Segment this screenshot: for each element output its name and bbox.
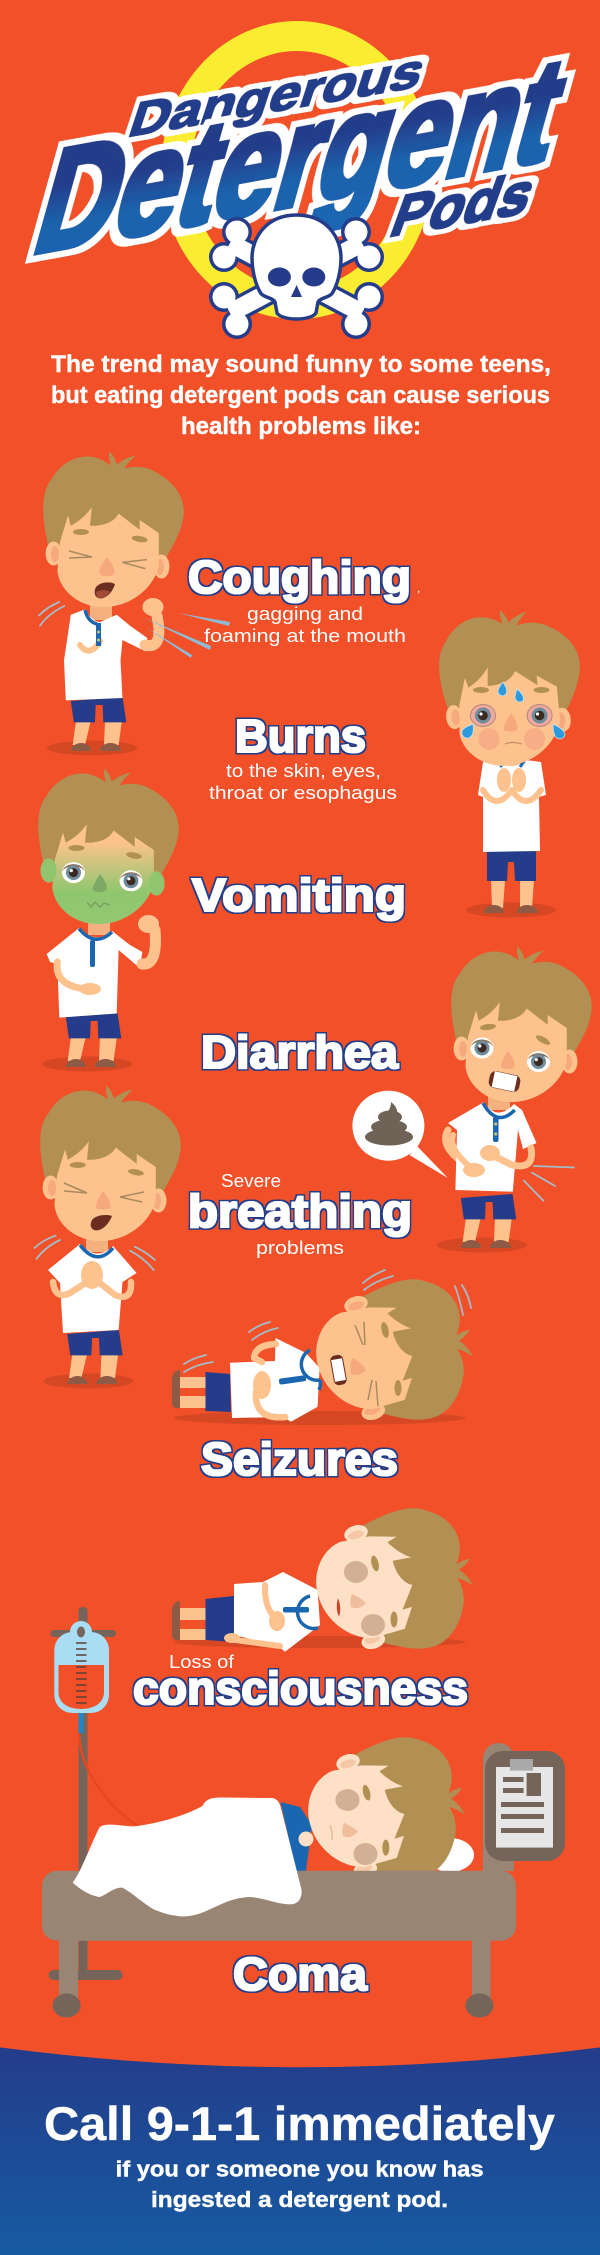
icon: IV stand and bag (49, 1607, 138, 1980)
boy: burns (434, 603, 589, 918)
text: Severe: Severe (221, 1171, 281, 1191)
boy in hospital bed (42, 1724, 565, 2018)
pillow (426, 1838, 474, 1872)
title word: Dangerous: Dangerous (122, 43, 432, 148)
blanket (73, 1798, 302, 1916)
clipboard (485, 1751, 565, 1861)
boy: seizures (172, 1266, 490, 1444)
text: gagging and foaming: gagging and (247, 604, 363, 624)
patient (280, 1724, 482, 1902)
heading: Coma: Coma (233, 1948, 367, 2000)
heading: consciousness: consciousness (133, 1662, 468, 1714)
footer panel (0, 2047, 600, 2255)
headboard (483, 1743, 514, 1871)
text: to the skin, eyes: to the skin, eyes, (226, 761, 381, 781)
intro text: but eating detergent pods can cause serious (51, 382, 550, 409)
text: gagging and foaming: foaming at the mouth (204, 626, 406, 646)
intro text: health problems like: (181, 413, 421, 440)
heading: breathing: breathing (188, 1185, 412, 1237)
text: gagging and foaming (204, 604, 406, 646)
title: Dangerous Detergent Pods (20, 25, 582, 339)
text: Loss of: Loss of (169, 1652, 235, 1672)
footer text: ingested a detergent pod. (151, 2187, 448, 2212)
title word: Pods: Pods (382, 158, 545, 250)
heading: Seizures: Seizures (201, 1433, 398, 1485)
pain lines (524, 1166, 574, 1201)
boy: vomiting (38, 768, 179, 1072)
intro text: The trend may sound funny to some teens, (51, 351, 551, 378)
heading: Burns: Burns (235, 710, 366, 762)
text: problems: problems (256, 1238, 344, 1258)
heading: Diarrhea: Diarrhea (201, 1026, 398, 1078)
footer text (116, 2156, 484, 2212)
icon: speech bubble with poop (352, 1091, 448, 1178)
boy: breathing problems (34, 1085, 181, 1388)
bed (42, 1871, 516, 2002)
boy: diarrhea (352, 946, 592, 1252)
wheels (53, 1994, 493, 2018)
icon: yellow ring (176, 36, 418, 304)
boy: coughing (39, 451, 230, 756)
footer text: if you or someone you know has (116, 2156, 484, 2182)
icon: skull and crossbones (209, 215, 384, 339)
heading: Vomiting: Vomiting (192, 869, 406, 921)
footer heading: Call 9-1-1 immediately (44, 2097, 555, 2150)
text: to the skin, eyes: throat or esophagus (209, 783, 397, 803)
boy: unconscious (172, 1495, 490, 1673)
icon: sweat and tears (462, 682, 565, 739)
text: to the skin, eyes (209, 761, 397, 803)
cough lines (39, 602, 230, 658)
intro text (51, 351, 551, 440)
heading: Coughing: Coughing (188, 551, 411, 603)
comma: , (417, 581, 420, 595)
